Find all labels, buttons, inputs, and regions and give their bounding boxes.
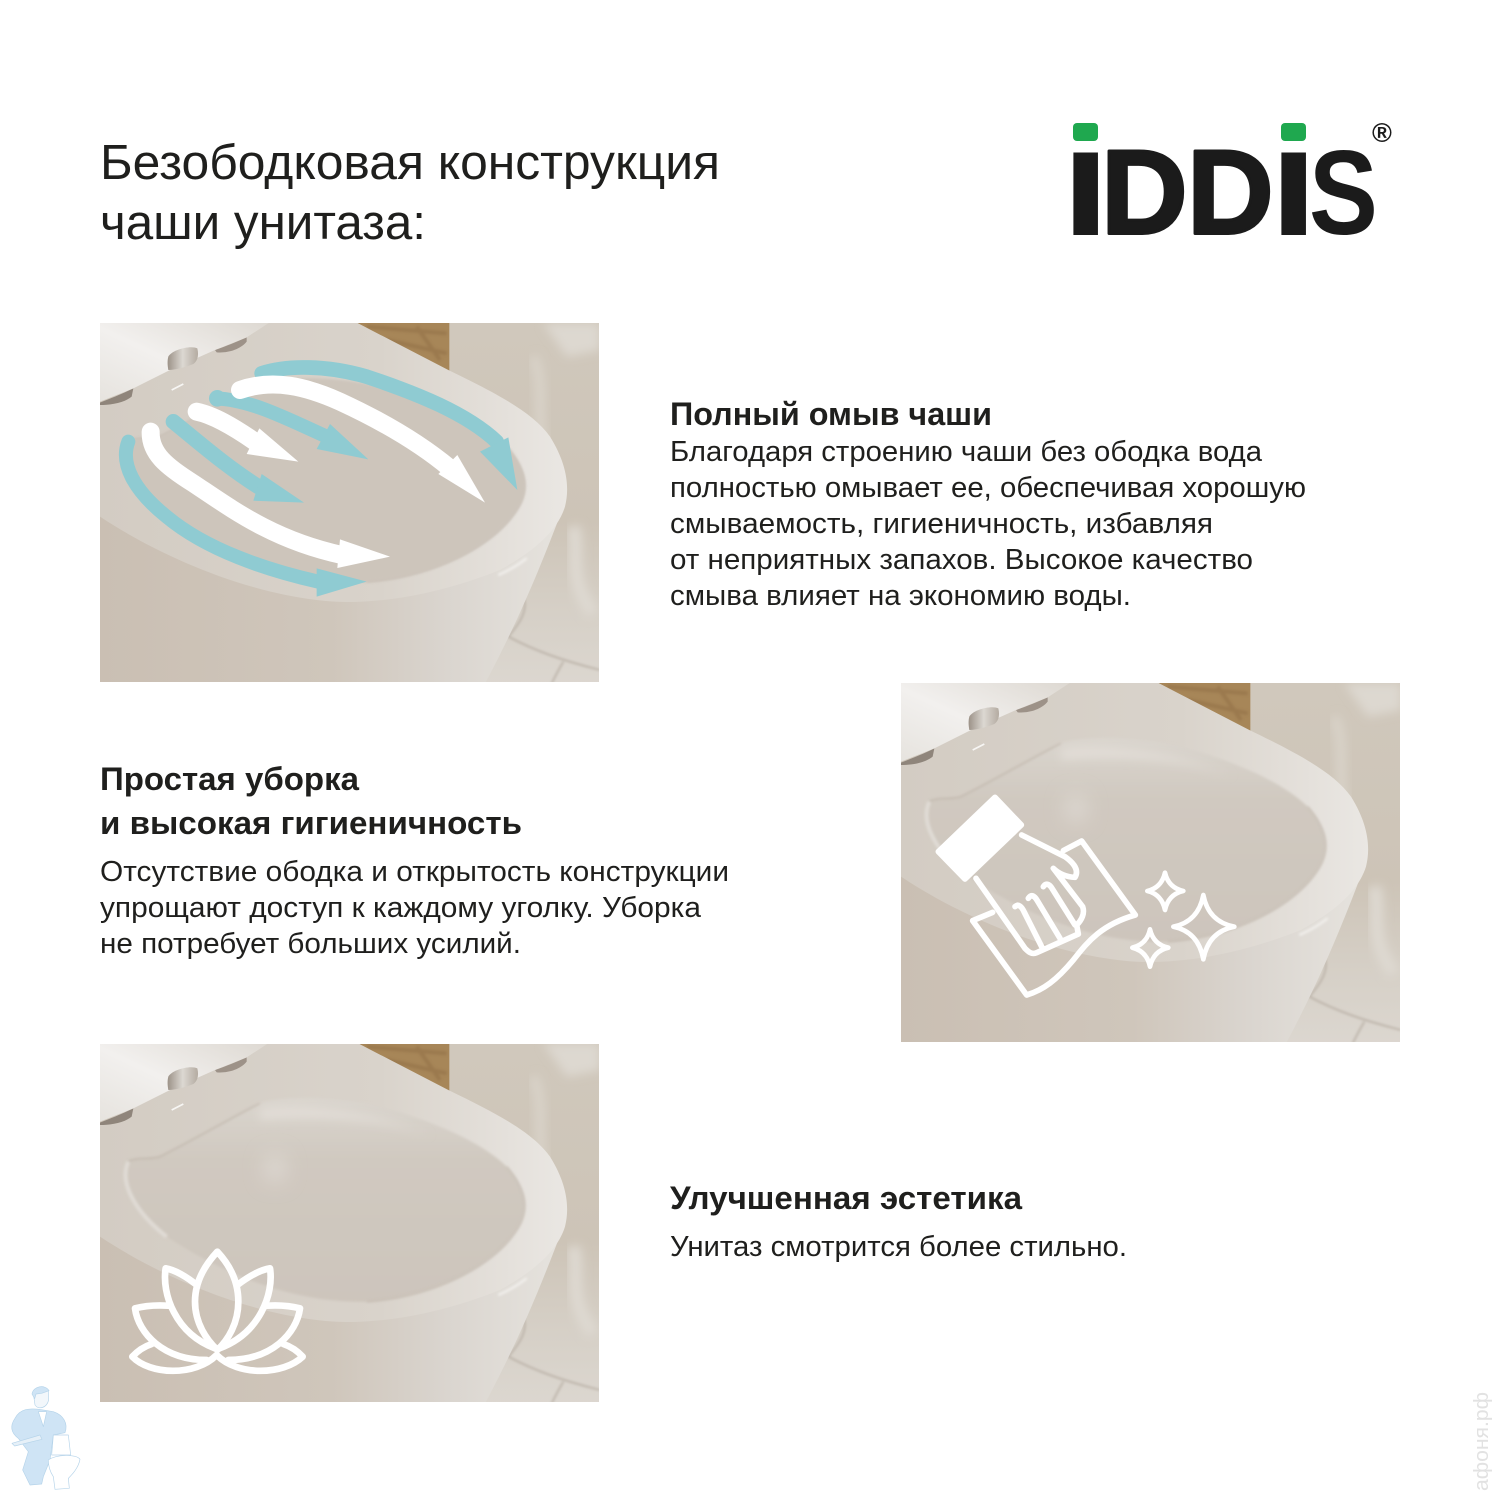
text block: improved aesthetics — [670, 1180, 1127, 1263]
text block: easy cleaning — [100, 761, 729, 960]
white arrows — [151, 385, 485, 568]
title — [100, 136, 720, 250]
panel: photo with lotus icon — [100, 1044, 599, 1402]
text block: full bowl wash: от неприятных запахов. Высокое качество — [670, 544, 1253, 576]
text block: full bowl wash — [670, 396, 1306, 612]
text block: easy cleaning: Простая уборка — [100, 761, 359, 797]
text block: full bowl wash: смываемость, гигиеничность, избавляя — [670, 508, 1213, 540]
panel: photo with water flow arrows — [100, 323, 599, 682]
icon: plumber mascot watermark — [12, 1386, 80, 1490]
text block: full bowl wash: Полный омыв чаши — [670, 396, 992, 432]
logo: IDDIS — [1062, 118, 1392, 245]
text block: full bowl wash: смыва влияет на экономию воды. — [670, 580, 1131, 612]
teal water arrows — [126, 367, 517, 597]
text block: easy cleaning: не потребует больших усилий. — [100, 928, 521, 960]
icon: lotus — [132, 1252, 303, 1371]
watermark text: афоня.рф — [1471, 1392, 1493, 1491]
text block: easy cleaning: упрощают доступ к каждому уголку. Уборка — [100, 892, 702, 924]
text block: improved aesthetics: Унитаз смотрится более стильно. — [670, 1231, 1127, 1263]
text block: full bowl wash: полностью омывает ее, обеспечивая хорошую — [670, 472, 1306, 504]
logo: IDDIS: ® — [1372, 118, 1392, 148]
title: чаши унитаза: — [100, 196, 426, 250]
panel: photo with cleaning icon — [901, 683, 1400, 1042]
text block: full bowl wash: Благодаря строению чаши без ободка вода — [670, 436, 1263, 468]
icon: sparkles — [1132, 873, 1234, 967]
icon: hand wiping with cloth — [938, 797, 1135, 995]
text block: improved aesthetics: Улучшенная эстетика — [670, 1180, 1022, 1216]
text block: easy cleaning: и высокая гигиеничность — [100, 805, 522, 841]
title: Безободковая конструкция — [100, 136, 720, 190]
text block: easy cleaning: Отсутствие ободка и открытость конструкции — [100, 856, 729, 888]
